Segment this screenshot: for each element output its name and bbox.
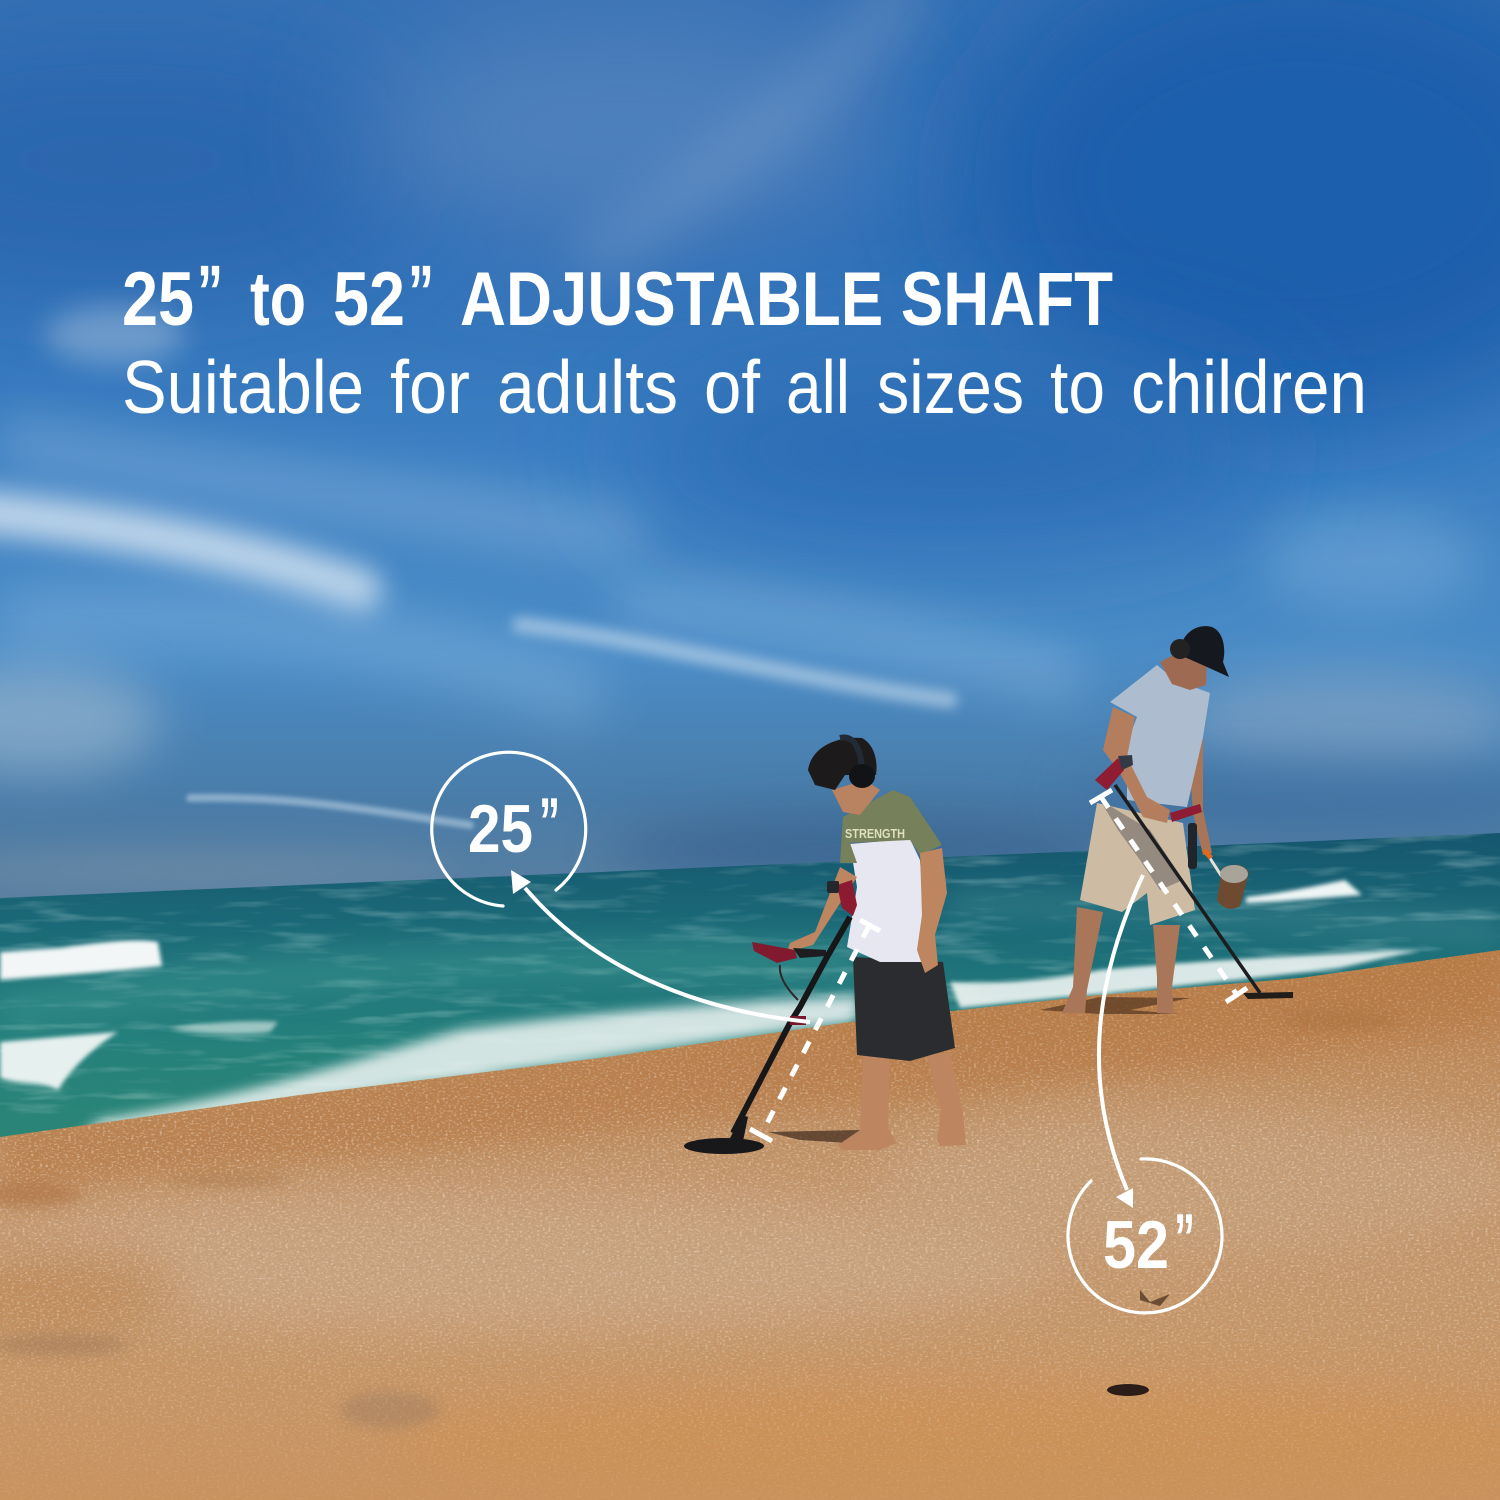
ocean with waves [0, 830, 1500, 1150]
boy's camo sleeve and chest [840, 790, 942, 863]
man's far arm [1188, 737, 1212, 855]
subheading: to [1050, 345, 1105, 429]
sandy beach [0, 940, 1500, 1500]
man's near arm [1103, 707, 1170, 823]
heading: ” [197, 250, 223, 335]
figure: man with detector [1040, 626, 1293, 1014]
callout: 52 inches [1068, 1159, 1222, 1313]
man's shadow [1040, 997, 1190, 1014]
man's shirt [1110, 665, 1210, 807]
subheading: of [704, 345, 760, 429]
man's cap and headphones [1170, 626, 1229, 677]
heading: ” [408, 250, 434, 335]
boy's white shirt [847, 839, 928, 962]
arrow: to 25 inch callout [511, 870, 810, 1022]
heading: ADJUSTABLE SHAFT [460, 257, 1113, 342]
boy's detector [684, 880, 857, 1154]
subheading: children [1131, 345, 1367, 429]
inch mark: ” [539, 784, 560, 860]
boy's legs [838, 1052, 966, 1150]
arrow: to 52 inch callout [1099, 875, 1143, 1208]
circle arc [1068, 1159, 1222, 1313]
boy's shirt lettering: STRENGTH [845, 826, 905, 841]
boy's hair [808, 738, 877, 790]
man's sand scoop [1204, 850, 1249, 909]
man's legs [1062, 907, 1180, 1014]
callout: 25 inches [432, 752, 586, 906]
man's shorts [1080, 803, 1195, 925]
sky with clouds [0, 0, 1500, 910]
subheading: sizes [877, 345, 1024, 429]
subheading: for [390, 345, 470, 429]
subheading: all [786, 345, 850, 429]
subheading: adults [497, 345, 678, 429]
man's head [1160, 650, 1207, 690]
value: 25 [468, 791, 533, 867]
heading: 52 [333, 257, 405, 342]
measurement: man dashed line [1090, 790, 1247, 1002]
boy's headphones [840, 737, 875, 788]
heading: to [250, 257, 306, 342]
man's detector [1095, 755, 1293, 999]
figure: boy with detector [684, 737, 966, 1154]
boy's shadow [768, 1130, 860, 1143]
boy's arms [787, 848, 947, 973]
subheading: Suitable [122, 345, 364, 429]
inch mark: ” [1174, 1200, 1195, 1276]
value: 52 [1103, 1207, 1169, 1283]
boy's shorts [853, 957, 955, 1061]
boy's face [832, 780, 880, 815]
measurement: boy dashed line [750, 920, 880, 1141]
circle arc [432, 752, 586, 906]
heading: 25 [122, 257, 194, 342]
